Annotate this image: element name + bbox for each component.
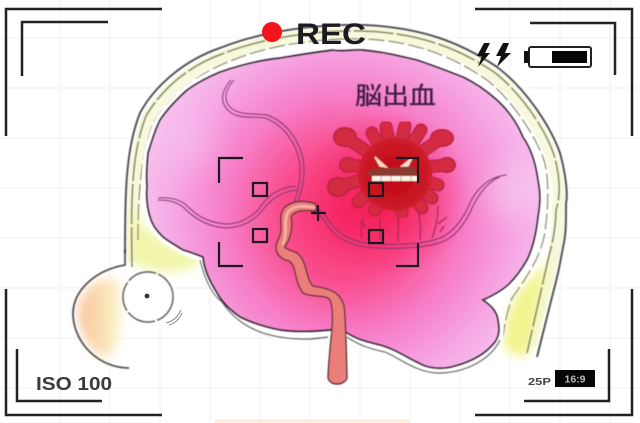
skull and head illustration [73,25,567,368]
pale yellow skull band [133,33,559,345]
focus bracket bottom right [396,243,418,266]
ISO label: ISO 100 [36,374,112,394]
skull outer line [125,25,567,357]
yellow patch lower left [131,205,203,272]
angry face mouth [367,167,418,177]
outer frame top right [475,9,632,136]
brain tissue [146,50,540,368]
focus bracket top right [396,158,418,183]
pupil [145,294,149,298]
brain white halo [147,50,540,368]
center crosshair [311,205,326,221]
clot lobes outline [327,126,456,213]
skull second line [132,31,559,353]
focus bracket bottom left [219,242,243,266]
artery highlight [283,206,314,244]
small vessel branches below clot [360,206,447,242]
focus point squares [253,183,383,243]
outer frame bottom left [6,289,162,415]
brain [142,46,544,386]
record indicator [262,18,366,51]
bottom edge tint [215,419,410,423]
autofocus frame [219,158,418,266]
face cheek [78,278,122,358]
skull inner dashed line [138,39,548,335]
frame rate label: 25P [528,376,551,388]
REC label: REC [296,18,366,51]
outer frame bottom right [475,289,632,415]
inner frame top right [530,23,615,75]
aspect ratio badge [555,370,595,387]
eyelash strokes [166,310,182,325]
label: brain hemorrhage: 脳出血 [355,83,436,110]
inner frame bottom right [524,349,609,401]
focus bracket top left [219,158,243,183]
red record dot [262,22,282,42]
right vessel [300,175,507,248]
aspect ratio badge: 16:9 [564,374,586,386]
main artery [276,201,347,384]
clot core [358,137,432,211]
icon: flash lightning bolts [477,43,511,67]
eye [123,272,173,322]
angry face eyes [375,157,386,167]
icon: battery [524,47,591,67]
brain outline [147,50,540,368]
inner frame top left [22,22,108,76]
left vessels and fissures [158,80,304,228]
inner frame bottom left [17,349,102,401]
forehead to face outline [73,250,129,368]
second outline under the brain [200,260,500,373]
hemorrhage clot [327,126,456,213]
clot lobes fill [328,126,454,213]
yellow patch lower right [504,256,549,356]
outer frame top left [6,9,162,136]
